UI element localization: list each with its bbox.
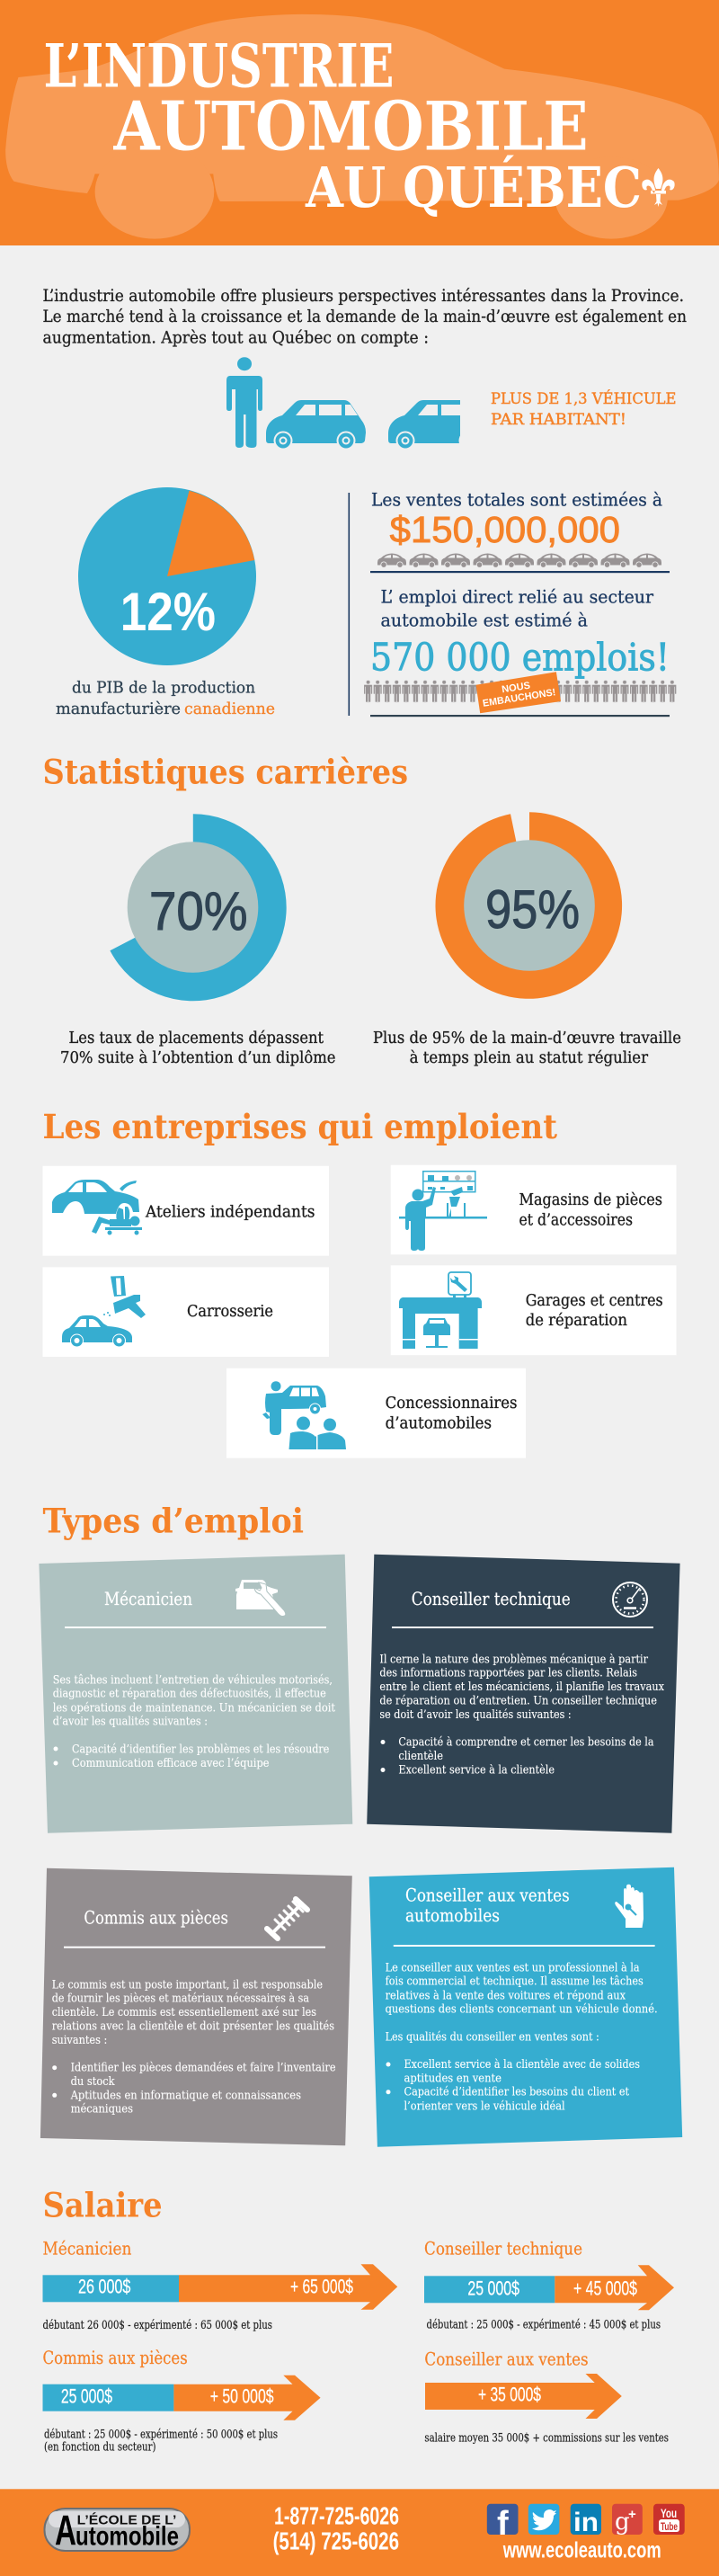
caption: placements: 70% suite à l’obtention d’un diplôme [60,1049,336,1067]
heading: types d'emploi: Types d’emploi [43,1501,304,1540]
salary: commis aux pièces [43,2348,321,2454]
heading: statistiques: Statistiques carrières [43,753,408,792]
icon: spray gun and car [62,1276,146,1347]
badge: nous embauchons: EMBAUCHONS! [482,687,556,709]
pie caption: du PIB de la production [72,679,255,698]
card body: aptitudes en vente [404,2072,502,2086]
salary: conseiller aux ventes: Conseiller aux ventes [424,2349,589,2370]
card body: se doit d’avoir les qualités suivantes : [379,1708,572,1722]
arrow: 25 000$ [467,2277,519,2299]
icon: person [226,357,262,448]
icon row: people [364,681,677,702]
card body: Excellent service à la clientèle avec de solides [404,2058,640,2072]
badge: nous embauchons: NOUS [502,681,531,695]
logo: A [55,2507,76,2554]
card body: Excellent service à la clientèle [398,1763,555,1777]
card title: automobiles [405,1904,500,1926]
panel: concessionnaires [226,1368,526,1458]
pie caption: canadienne [184,700,275,718]
callout: vehicles per inhabitant: PLUS DE 1,3 VÉHICULE [491,389,676,408]
icon: youtube: Tube [661,2520,678,2533]
panel: commis aux pièces [40,1868,352,2145]
panel: magasins [391,1165,676,1254]
title: AUTOMOBILE [113,87,589,166]
website: www.ecoleauto.com [502,2537,661,2563]
label: et d’accessoires [519,1212,633,1230]
icon: fleur-de-lis [642,168,675,207]
panel: mécanicien [39,1555,352,1833]
icon: mechanic under car [52,1180,142,1235]
icon: facebook: f [497,2505,509,2543]
panel: carrosserie [43,1267,329,1357]
caption: full time: Plus de 95% de la main-d’œuvre travaille [373,1030,681,1047]
label [519,1191,662,1230]
icon: google plus [612,2504,643,2536]
logo [45,2507,190,2554]
icon: linkedin: in [573,2508,599,2537]
card body: relations avec la clientèle et doit présenter les qualités [52,2019,334,2033]
card body: d’avoir les qualités suivantes : [53,1716,208,1729]
salary: commis aux pièces: Commis aux pièces [43,2348,188,2368]
card title: Mécanicien [104,1588,192,1609]
arrow: + 45 000$ [573,2277,637,2299]
icon: parts store [399,1172,487,1251]
card title: Conseiller aux ventes [405,1884,570,1905]
salary: mécanicien: débutant 26 000$ - expérimenté : 65 000$ et plus [43,2319,272,2332]
caption: placements: Les taux de placements dépassent [68,1030,324,1047]
caption: full time: à temps plein au statut régulier [410,1049,649,1067]
arrow: + 50 000$ [210,2384,274,2407]
card body: questions des clients concernant un véhicule donné. [386,2003,658,2017]
phone numbers [273,2502,399,2555]
arrow [43,2375,321,2420]
sales text: Les ventes totales sont estimées à [371,490,662,511]
arrow: 26 000$ [78,2276,130,2298]
intro text [43,287,687,348]
header banner [0,0,719,245]
card body: l’orienter vers le véhicule idéal [404,2099,565,2113]
donut chart: 95%: 95% [485,879,580,940]
salary: mécanicien [43,2238,397,2332]
icon: youtube: You [661,2506,677,2520]
footer [0,2489,719,2576]
card body: diagnostic et réparation des défectuosités, il effectue [53,1688,326,1701]
label: Garages et centres [526,1292,663,1310]
salary: conseiller technique: Conseiller technique [424,2238,582,2259]
pie caption [56,679,275,718]
card body: les opérations de maintenance. Un mécanicien se doit [53,1701,336,1715]
icon: facebook [487,2504,518,2543]
callout: vehicles per inhabitant [491,389,676,429]
card body [386,1961,658,2113]
card body: mécaniques [71,2103,133,2117]
caption: placements [60,1030,336,1067]
icon: google plus: + [628,2507,636,2522]
card body: Capacité à comprendre et cerner les besoins de la [398,1736,654,1750]
label: d’automobiles [386,1414,492,1432]
phone numbers: (514) 725-6026 [273,2527,399,2555]
icon: car [266,400,366,450]
card title [405,1884,570,1926]
panel: ateliers [43,1166,329,1256]
panel: conseiller technique [367,1555,680,1833]
employment text: L’ emploi direct relié au secteur [381,587,654,608]
icon: youtube [653,2504,685,2535]
arrow [424,2265,674,2310]
icon: twitter [528,2504,559,2535]
card body: Le commis est un poste important, il est responsable [52,1978,323,1992]
badge: nous embauchons [476,672,561,713]
salary: conseiller technique [424,2238,674,2331]
icon: car and wrench [235,1580,286,1617]
arrow: 25 000$ [61,2384,112,2407]
title [43,31,642,220]
icon: hand with key [615,1885,644,1928]
card body: de réparation ou d’entretien. Un conseiller technique [379,1695,657,1708]
donut chart: 95% [435,812,622,999]
pie chart: 12% [78,487,256,665]
card body [53,1673,336,1770]
card body [379,1653,665,1777]
card body: Il cerne la nature des problèmes mécanique à partir [379,1653,649,1666]
label: Concessionnaires [386,1395,518,1413]
label [386,1395,518,1432]
employment text: automobile est estimé à [381,611,588,631]
card body [52,1978,336,2117]
panel: garages [391,1265,676,1355]
donut chart: 70% [110,814,287,1001]
card body: Le conseiller aux ventes est un professionnel à la [386,1961,640,1974]
salary: conseiller aux ventes [424,2349,669,2445]
card body: clientèle. Le commis est essentiellement axé sur les [52,2006,316,2019]
title: L’INDUSTRIE [43,31,394,102]
icon row: cars [377,554,661,567]
salary: mécanicien: Mécanicien [43,2238,132,2259]
card title: Commis aux pièces [84,1906,228,1928]
card body: Aptitudes en informatique et connaissances [70,2089,301,2102]
card body: entre le client et les mécaniciens, il planifie les travaux [379,1680,665,1694]
icon: garage [399,1272,482,1349]
label: Ateliers indépendants [145,1203,315,1221]
logo: utomobile [75,2522,179,2552]
caption: full time [373,1030,681,1067]
donut chart: 70%: 70% [149,881,248,941]
arrow: + 65 000$ [290,2276,353,2298]
sales figure: $150,000,000 [390,509,620,550]
car silhouette [5,14,719,239]
icon: partial car [388,400,460,448]
card title: Conseiller technique [412,1588,571,1609]
logo: L’ÉCOLE DE L’ [77,2512,176,2527]
panel: conseiller aux ventes [369,1867,682,2147]
arrow [425,2374,622,2419]
icon: google plus: g [615,2509,630,2536]
card body: Capacité d’identifier les problèmes et les résoudre [72,1743,330,1756]
intro text: L’industrie automobile offre plusieurs perspectives intéressantes dans la Province. [43,287,684,306]
callout: vehicles per inhabitant: PAR HABITANT! [491,411,626,429]
card body: Ses tâches incluent l’entretien de véhicules motorisés, [53,1673,333,1687]
card body: Capacité d’identifier les besoins du client et [404,2086,630,2099]
employment figure: 570 000 emplois! [370,636,670,680]
label: Magasins de pièces [519,1191,662,1209]
icon: linkedin [571,2504,601,2537]
card body: Les qualités du conseiller en ventes sont : [386,2030,599,2044]
heading: salaire: Salaire [43,2186,163,2225]
card body: de fournir les pièces et matériaux nécessaires à sa [52,1992,309,2006]
icon: speedometer [613,1582,647,1617]
heading: entreprises: Les entreprises qui emploient [43,1107,557,1146]
salary: commis aux pièces: (en fonction du secteur) [44,2440,156,2454]
card body: suivantes : [52,2034,107,2047]
intro text: augmentation. Après tout au Québec on compte : [43,329,429,348]
card body: relatives à la vente des voitures et répond aux [386,1989,626,2002]
arrow [43,2264,397,2310]
phone numbers: 1-877-725-6026 [274,2502,399,2530]
salary: commis aux pièces: débutant : 25 000$ - expérimenté : 50 000$ et plus [44,2429,278,2442]
card body: du stock [71,2075,115,2089]
pie value: 12% [120,582,216,642]
icon: suspension spring [267,1899,307,1939]
arrow: + 35 000$ [478,2384,541,2406]
employment text [381,587,654,631]
label: Carrosserie [187,1303,273,1321]
pie caption: manufacturière [56,700,181,718]
card body: des informations rapportées par les clients. Relais [379,1667,637,1680]
label: de réparation [526,1312,627,1330]
icon: dealer and customers [262,1381,346,1449]
card body: clientèle [398,1750,443,1763]
card body: Communication efficace avec l’équipe [72,1757,270,1770]
title: AU QUÉBEC [305,155,642,220]
card body: Identifier les pièces demandées et faire l’inventaire [71,2062,336,2075]
label [526,1292,663,1330]
card body: fois commercial et technique. Il assume les tâches [386,1975,644,1989]
